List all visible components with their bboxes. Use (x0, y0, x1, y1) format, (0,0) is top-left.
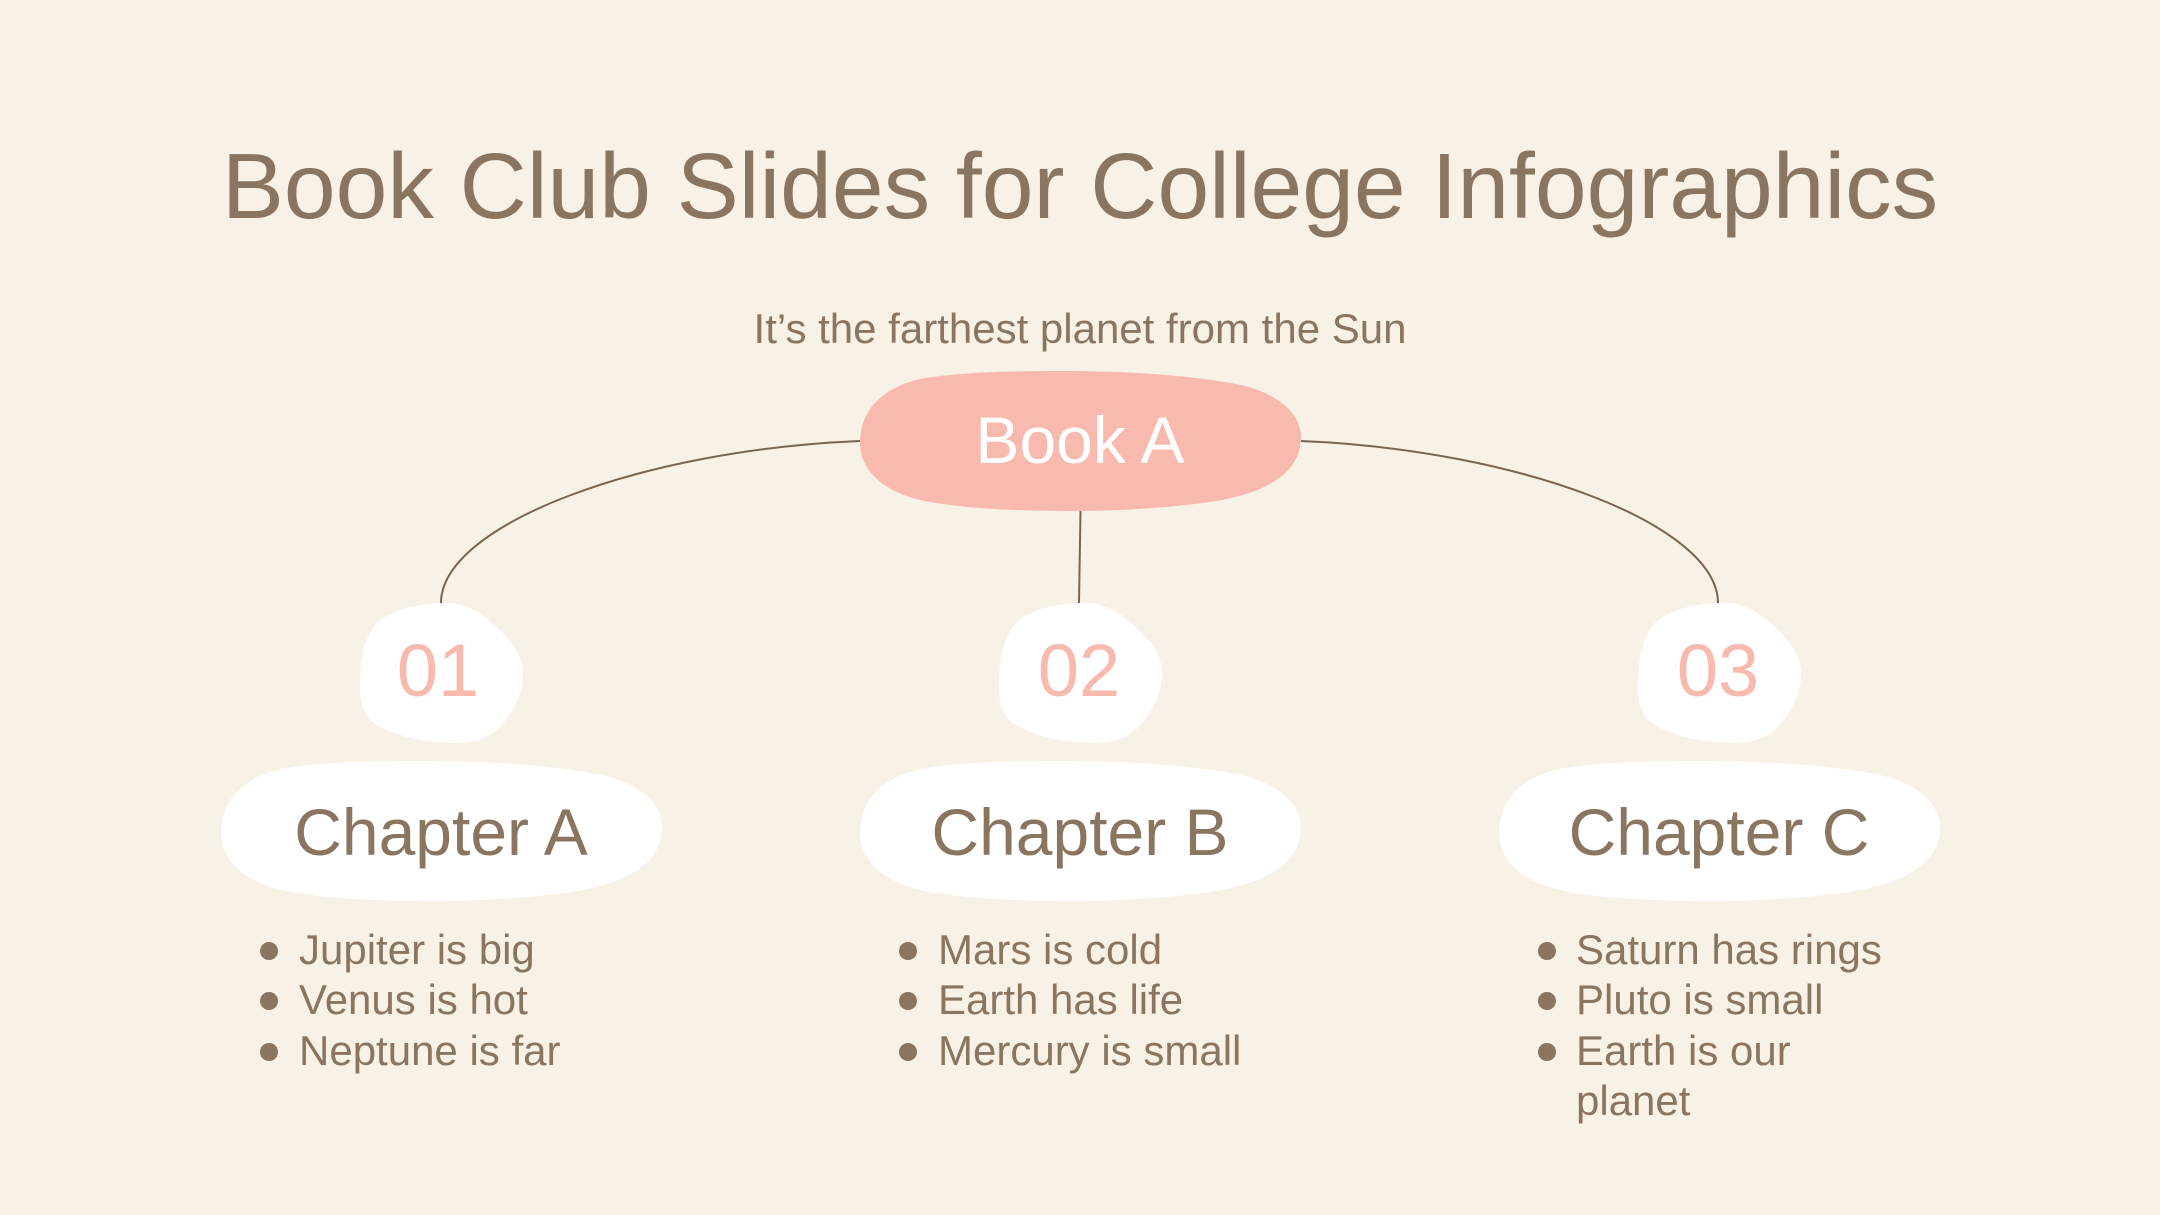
number badge 01: 01 (397, 629, 479, 712)
column: Chapter B (860, 603, 1301, 1074)
number badge 01 (360, 603, 523, 743)
bullet list A: Jupiter is big (299, 926, 535, 973)
number badge 03 (1638, 603, 1801, 743)
node: Book A (860, 371, 1301, 511)
connector: Book A to Chapter C (1301, 441, 1718, 603)
bullet list B: Mercury is small (938, 1027, 1241, 1074)
number badge 02: 02 (1038, 629, 1120, 712)
bullet list C: planet (1576, 1077, 1691, 1124)
number badge 02 (999, 603, 1162, 743)
node: Book A: Book A (975, 403, 1185, 477)
connector: Book A to Chapter B (1079, 511, 1080, 603)
heading Chapter C (1499, 761, 1940, 901)
bullet list A (260, 926, 560, 1074)
bullet list C (1538, 926, 1882, 1124)
bullet list B: Earth has life (938, 976, 1183, 1023)
subtitle: It’s the farthest planet from the Sun (754, 305, 1406, 352)
title: Book Club Slides for College Infographics (222, 134, 1938, 238)
heading Chapter A: Chapter A (294, 795, 588, 869)
heading Chapter C: Chapter C (1569, 795, 1869, 869)
heading Chapter B: Chapter B (931, 795, 1229, 869)
connector: Book A to Chapter A (441, 441, 860, 603)
heading Chapter B (860, 761, 1301, 901)
column: Chapter C (1499, 603, 1940, 1124)
bullet list B (899, 926, 1241, 1074)
bullet list B: Mars is cold (938, 926, 1162, 973)
bullet list C: Earth is our (1576, 1027, 1791, 1074)
bullet list A: Neptune is far (299, 1027, 560, 1074)
bullet list C: Saturn has rings (1576, 926, 1882, 973)
bullet list C: Pluto is small (1576, 976, 1823, 1023)
number badge 03: 03 (1677, 629, 1759, 712)
bullet list A: Venus is hot (299, 976, 528, 1023)
heading Chapter A (221, 761, 662, 901)
column: Chapter A (221, 603, 662, 1074)
